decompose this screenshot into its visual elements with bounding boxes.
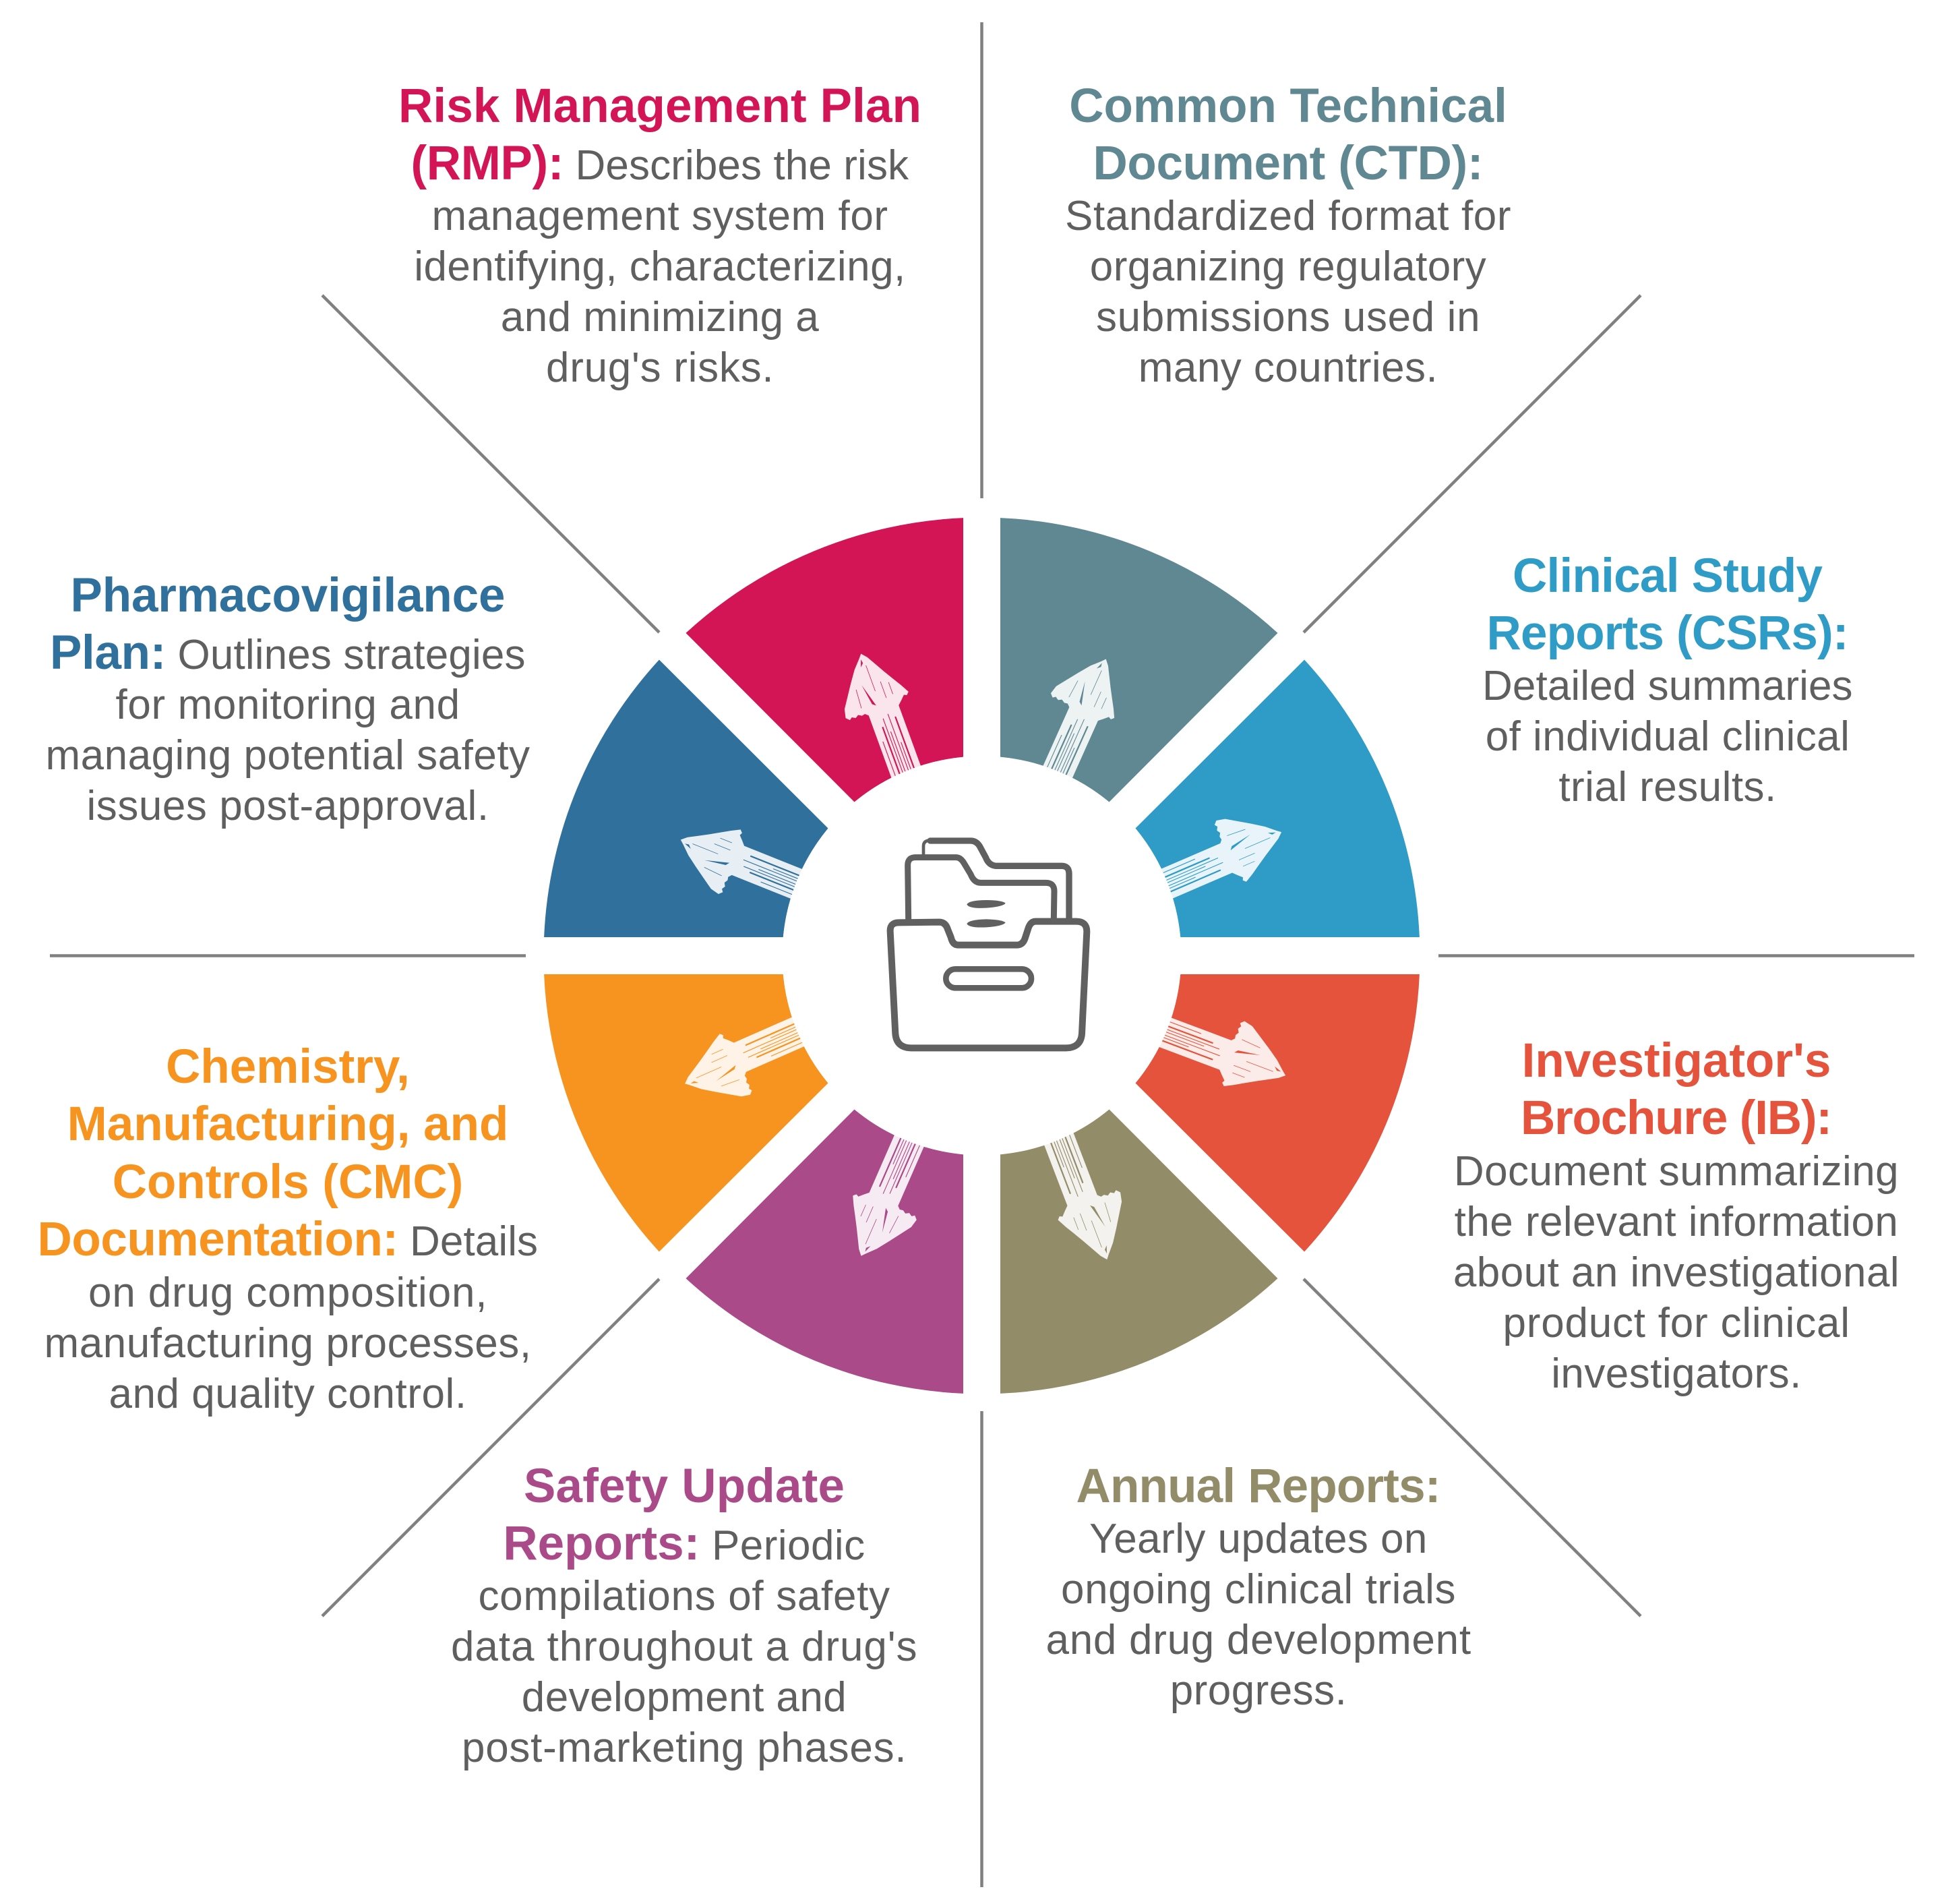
heading: Pharmacovigilance Plan: Pharmacovigilance <box>70 569 506 622</box>
heading: Clinical Study Reports (CSRs): Reports (CSRs): <box>1487 607 1848 660</box>
body text: and drug development <box>1046 1617 1471 1663</box>
segment: Common Technical Document <box>1000 518 1278 802</box>
heading: Chemistry, Manufacturing, and Controls (CMC) Documentation: Controls (CMC) <box>113 1156 463 1209</box>
panel: Safety Update Reports <box>451 1460 917 1771</box>
panel: CMC Documentation <box>38 1040 538 1417</box>
arrow: olive segment <box>1027 1116 1141 1271</box>
body text <box>46 682 530 829</box>
arrow: red-orange segment <box>1145 992 1298 1105</box>
body text: compilations of safety <box>479 1573 890 1619</box>
heading: Common Technical Document (CTD) <box>1069 80 1507 190</box>
body text: Document summarizing <box>1454 1148 1899 1195</box>
segment: Investigator's Brochure <box>1135 974 1420 1251</box>
body text: on drug composition, <box>88 1270 487 1316</box>
body text: Yearly updates on <box>1089 1516 1428 1562</box>
panel: Common Technical Document <box>1065 80 1511 391</box>
body text: trial results. <box>1558 764 1777 810</box>
heading: Chemistry, Manufacturing, and Controls (CMC) Documentation: Manufacturing, and <box>67 1098 508 1151</box>
icon: open folder with documents <box>890 840 1087 1048</box>
sketch arrows <box>667 643 1298 1271</box>
body text: the relevant information <box>1455 1199 1898 1245</box>
segment: CMC Documentation <box>544 974 828 1251</box>
segment: Clinical Study Reports <box>1135 659 1420 937</box>
body text <box>1453 1148 1900 1397</box>
heading: Investigator's Brochure (IB) <box>1521 1034 1832 1145</box>
body text <box>414 193 906 391</box>
heading: Risk Management Plan <box>398 80 921 190</box>
arrow: teal segment <box>1020 645 1135 790</box>
heading: Safety Update Reports <box>503 1460 865 1570</box>
heading: Risk Management Plan: Risk Management Plan <box>398 80 921 133</box>
arrow: purple segment <box>832 1121 948 1270</box>
arrow: red segment <box>827 643 936 792</box>
segment: Safety Update Reports <box>686 1110 963 1394</box>
body text: for monitoring and <box>116 682 460 728</box>
heading: Chemistry, Manufacturing, and Controls (CMC) Documentation: Documentation: Details <box>38 1213 538 1266</box>
heading: Pharmacovigilance Plan <box>50 569 526 680</box>
heading: Investigator's Brochure (IB): Brochure (IB): <box>1521 1092 1832 1145</box>
body text: managing potential safety <box>46 732 530 779</box>
body text <box>451 1573 917 1771</box>
heading: Clinical Study Reports (CSRs) <box>1487 549 1848 660</box>
body text: ongoing clinical trials <box>1061 1566 1456 1613</box>
segment: Pharmacovigilance Plan <box>544 659 828 937</box>
heading: Clinical Study Reports (CSRs): Clinical Study <box>1513 549 1823 603</box>
heading: Chemistry, Manufacturing, and Controls (CMC) Documentation <box>38 1040 538 1266</box>
body text: many countries. <box>1138 345 1438 391</box>
body text: progress. <box>1170 1667 1347 1714</box>
arrow: dark blue segment <box>667 810 816 923</box>
segment: Annual Reports <box>1000 1110 1278 1394</box>
heading: Safety Update Reports: Safety Update <box>524 1460 845 1513</box>
body text: post-marketing phases. <box>462 1725 907 1771</box>
heading: Risk Management Plan: (RMP): Describes the risk <box>411 137 909 190</box>
heading: Investigator's Brochure (IB): Investigator's <box>1522 1034 1831 1088</box>
body text: Detailed summaries <box>1482 663 1853 709</box>
heading: Chemistry, Manufacturing, and Controls (CMC) Documentation: Chemistry, <box>166 1040 410 1094</box>
body text <box>1046 1516 1471 1714</box>
body text: product for clinical <box>1503 1300 1850 1346</box>
heading: Common Technical Document (CTD): Common Technical <box>1069 80 1507 133</box>
segment: Risk Management Plan <box>686 518 963 802</box>
body text: Standardized format for <box>1065 193 1511 239</box>
arrow: blue segment <box>1145 799 1294 914</box>
body text: and minimizing a <box>501 294 819 340</box>
panel: Investigator's Brochure <box>1453 1034 1900 1397</box>
heading: Common Technical Document (CTD): Document (CTD): <box>1093 137 1483 190</box>
body text: of individual clinical <box>1486 713 1850 760</box>
body text: about an investigational <box>1453 1249 1900 1296</box>
body text: issues post-approval. <box>86 783 489 829</box>
body text: manufacturing processes, <box>44 1320 531 1367</box>
body text <box>1482 663 1853 810</box>
heading: Annual Reports: Annual Reports: <box>1076 1460 1441 1513</box>
wheel: eight coloured segments <box>544 518 1420 1394</box>
heading: Pharmacovigilance Plan: Plan: Outlines strategies <box>50 626 526 680</box>
body text: drug's risks. <box>546 345 774 391</box>
body text: and quality control. <box>109 1371 466 1417</box>
panel: Annual Reports <box>1046 1460 1471 1714</box>
body text: identifying, characterizing, <box>414 243 906 290</box>
heading: Safety Update Reports: Reports: Periodic <box>503 1517 865 1570</box>
body text: management system for <box>431 193 888 239</box>
body text: development and <box>522 1674 847 1721</box>
panel: Pharmacovigilance Plan <box>46 569 530 829</box>
body text: data throughout a drug's <box>451 1624 917 1670</box>
body text: organizing regulatory <box>1090 243 1486 290</box>
panel: Clinical Study Reports <box>1482 549 1853 810</box>
panel: Risk Management Plan <box>398 80 921 391</box>
body text: submissions used in <box>1096 294 1480 340</box>
centre hub <box>782 756 1181 1156</box>
body text <box>44 1270 531 1417</box>
body text: investigators. <box>1551 1350 1802 1397</box>
body text <box>1065 193 1511 391</box>
arrow: orange segment <box>672 1001 822 1117</box>
